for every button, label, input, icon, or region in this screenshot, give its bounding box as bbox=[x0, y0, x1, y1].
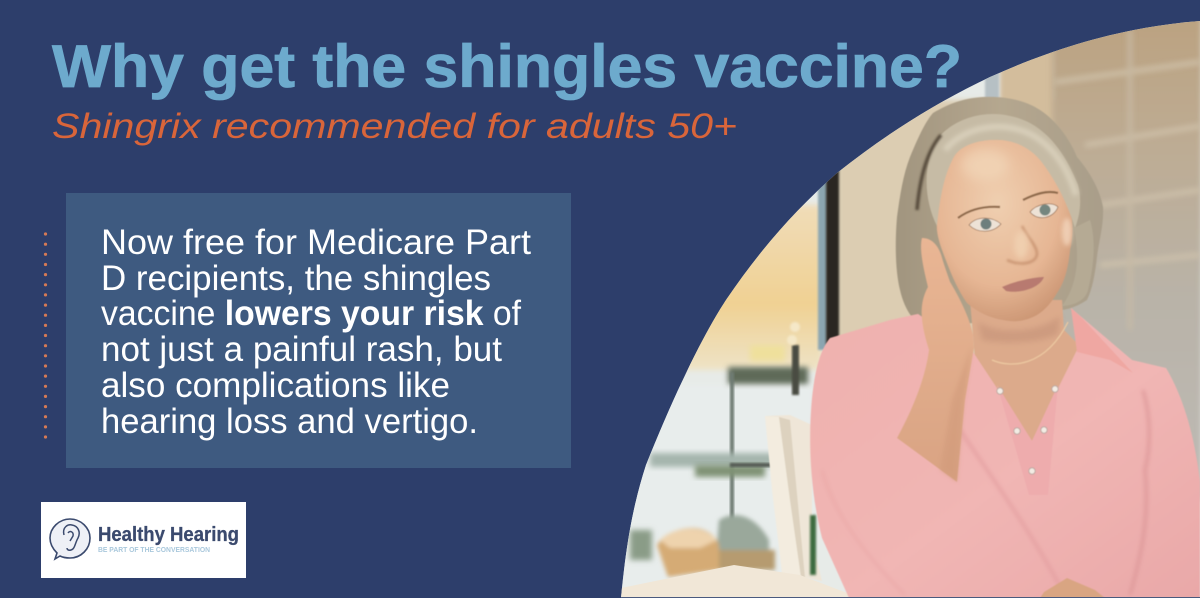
necklace bbox=[992, 322, 1068, 364]
icon: ear in speech bubble bbox=[50, 519, 90, 559]
collar bbox=[1071, 308, 1133, 373]
woman bbox=[810, 97, 1200, 598]
logo: Healthy Hearing bbox=[41, 502, 246, 578]
photo: woman holding her ear bbox=[600, 0, 1200, 598]
eyes and brows bbox=[958, 192, 1058, 231]
photo background: room and wall bbox=[600, 0, 1200, 598]
forearm inner shadow bbox=[940, 376, 964, 481]
hair highlight streak bbox=[945, 127, 1076, 195]
body text: not just a painful rash, but bbox=[101, 330, 502, 369]
forehead highlight bbox=[961, 149, 1009, 181]
logo tagline: BE PART OF THE CONVERSATION bbox=[98, 547, 210, 554]
face bbox=[937, 140, 1072, 321]
bottom hand bbox=[1040, 578, 1105, 598]
nose highlight bbox=[1014, 231, 1028, 259]
title: Why get the shingles vaccine? bbox=[52, 33, 962, 100]
basket and towels bbox=[657, 515, 775, 577]
body text: also complications like bbox=[101, 366, 450, 405]
panel: text box bbox=[66, 193, 571, 468]
body text bbox=[101, 223, 531, 441]
shirt folds bbox=[962, 432, 1056, 579]
subtitle: Shingrix recommended for adults 50+ bbox=[52, 107, 737, 146]
hair fringe bbox=[927, 114, 1080, 228]
body text: D recipients, the shingles bbox=[101, 259, 491, 298]
neck shadow bbox=[980, 320, 1058, 342]
placket bbox=[998, 386, 1056, 488]
right hair strands bbox=[1064, 221, 1093, 305]
hair parting shadow bbox=[917, 135, 941, 210]
table bbox=[621, 565, 860, 598]
mouth bbox=[1002, 277, 1044, 292]
body text: Now free for Medicare Part bbox=[101, 223, 531, 262]
hair back bbox=[896, 97, 1103, 330]
buttons bbox=[997, 386, 1058, 474]
logo wordmark: Healthy Hearing bbox=[98, 524, 239, 546]
arm and hand bbox=[897, 238, 974, 482]
bottom edge bbox=[621, 597, 1200, 598]
body text: vaccine lowers your risk of bbox=[101, 294, 521, 333]
nose bbox=[1007, 226, 1037, 263]
chair bbox=[765, 415, 822, 581]
cheek highlight bbox=[1062, 218, 1072, 246]
neck bbox=[970, 300, 1082, 445]
body text: hearing loss and vertigo. bbox=[101, 402, 478, 441]
woman's shirt bbox=[810, 308, 1200, 598]
dotted vertical line bbox=[44, 232, 47, 439]
